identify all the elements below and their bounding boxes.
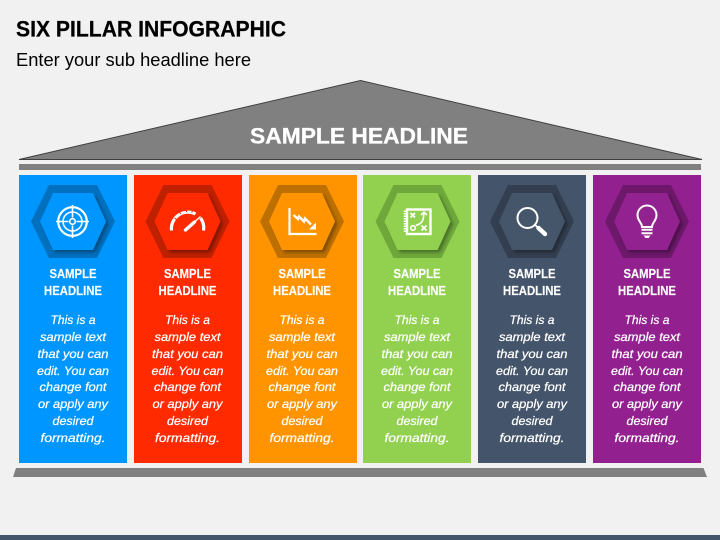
pillar 6 text: or apply any: [612, 397, 683, 411]
pillar 2 heading: HEADLINE: [158, 284, 216, 298]
pillar 2 text: or apply any: [152, 397, 223, 411]
pillar 1 text: or apply any: [38, 397, 109, 411]
pillar 3 text: desired: [282, 414, 324, 428]
pillar 5 text: change font: [498, 380, 566, 394]
pillar 2 text: that you can: [152, 347, 223, 361]
pillar 1 text: that you can: [38, 347, 109, 361]
pillar 1 text: sample text: [40, 330, 107, 344]
pillar 6 text: [611, 313, 683, 445]
roof: [19, 80, 702, 160]
pillar 5 text: desired: [512, 414, 554, 428]
pillar 4 heading: HEADLINE: [388, 284, 446, 298]
pillar 2 text: edit. You can: [152, 364, 224, 378]
pillar 2 heading: [158, 267, 216, 298]
pillar 1 heading: [44, 267, 102, 298]
pillar 3 heading: [273, 267, 331, 298]
pillar 2 text: formatting.: [155, 431, 220, 445]
icon: falling chart: [260, 185, 344, 258]
title: SIX PILLAR INFOGRAPHIC: [16, 17, 286, 42]
pillar 4 text: or apply any: [382, 397, 453, 411]
pillar 3 text: This is a: [280, 313, 325, 327]
pillar 4: green: [363, 175, 471, 463]
pillar 1 text: edit. You can: [37, 364, 109, 378]
pillar 2 text: This is a: [165, 313, 210, 327]
pillar 3 text: or apply any: [267, 397, 338, 411]
roof headline: SAMPLE HEADLINE: [250, 124, 468, 148]
pillar 1 heading: HEADLINE: [44, 284, 102, 298]
pillar 1 text: change font: [40, 380, 107, 394]
pillar 1 text: [37, 313, 109, 445]
icon: magnifier: [490, 185, 574, 258]
pillar 5 text: or apply any: [497, 397, 568, 411]
pillar 4 text: This is a: [394, 313, 440, 327]
pillar 4 text: that you can: [382, 347, 453, 361]
pillar 1 text: This is a: [50, 313, 96, 327]
pillar 3 heading: SAMPLE: [278, 267, 326, 281]
pillar 3 text: edit. You can: [266, 364, 338, 378]
temple base: [13, 468, 707, 477]
pillar 4 text: sample text: [384, 330, 451, 344]
pillar 2 text: [152, 313, 224, 445]
pillar 2 heading: SAMPLE: [164, 267, 211, 281]
pillar 3 text: sample text: [269, 330, 336, 344]
pillar 6 text: change font: [614, 380, 681, 394]
subtitle: Enter your sub headline here: [16, 50, 251, 70]
pillar 6 text: edit. You can: [611, 364, 683, 378]
pillar 6: purple: [593, 175, 701, 463]
footer bar: [0, 535, 720, 540]
pillar 3 heading: HEADLINE: [273, 284, 331, 298]
pillar 1 text: formatting.: [40, 431, 106, 445]
icon: strategy notebook: [376, 185, 460, 258]
pillar 5 heading: HEADLINE: [503, 284, 561, 298]
icon: target: [31, 185, 115, 258]
pillar 5 heading: SAMPLE: [508, 267, 556, 281]
pillar 2 text: change font: [154, 380, 222, 394]
pillar 5 text: that you can: [496, 347, 568, 361]
pillar 5 text: [496, 313, 568, 445]
pillar 5 text: formatting.: [500, 431, 564, 445]
icon: light bulb: [605, 185, 689, 258]
pillar 4 text: formatting.: [384, 431, 450, 445]
pillar 3 text: [266, 313, 338, 445]
pillar 6 text: that you can: [612, 347, 683, 361]
icon: gauge: [146, 185, 230, 258]
pillar 5 text: sample text: [499, 330, 566, 344]
beam: [19, 164, 701, 170]
pillar 4 text: edit. You can: [381, 364, 453, 378]
pillar 6 text: sample text: [614, 330, 681, 344]
pillar 5 text: edit. You can: [496, 364, 568, 378]
pillar 5 heading: [503, 267, 561, 298]
pillar 5 text: This is a: [510, 313, 555, 327]
pillar 3 text: change font: [268, 380, 336, 394]
pillar 2: red: [134, 175, 242, 463]
pillar 1: blue: [19, 175, 127, 463]
pillar 1 text: desired: [52, 414, 95, 428]
pillar 6 heading: [618, 267, 676, 298]
pillar 6 text: desired: [626, 414, 669, 428]
pillar 1 heading: SAMPLE: [50, 267, 96, 281]
pillar 4 text: desired: [396, 414, 439, 428]
pillar 3: orange: [249, 175, 357, 463]
pillar 4 text: change font: [384, 380, 451, 394]
pillar 6 text: This is a: [624, 313, 670, 327]
pillar 4 heading: [388, 267, 446, 298]
pillar 4 heading: SAMPLE: [394, 267, 440, 281]
pillar 6 heading: HEADLINE: [618, 284, 676, 298]
pillar 2 text: desired: [167, 414, 209, 428]
pillar 3 text: formatting.: [270, 431, 334, 445]
pillar 6 text: formatting.: [614, 431, 680, 445]
pillar 6 heading: SAMPLE: [624, 267, 670, 281]
pillar 5: slate: [478, 175, 586, 463]
pillar 3 text: that you can: [266, 347, 338, 361]
pillar 2 text: sample text: [154, 330, 221, 344]
pillar 4 text: [381, 313, 453, 445]
